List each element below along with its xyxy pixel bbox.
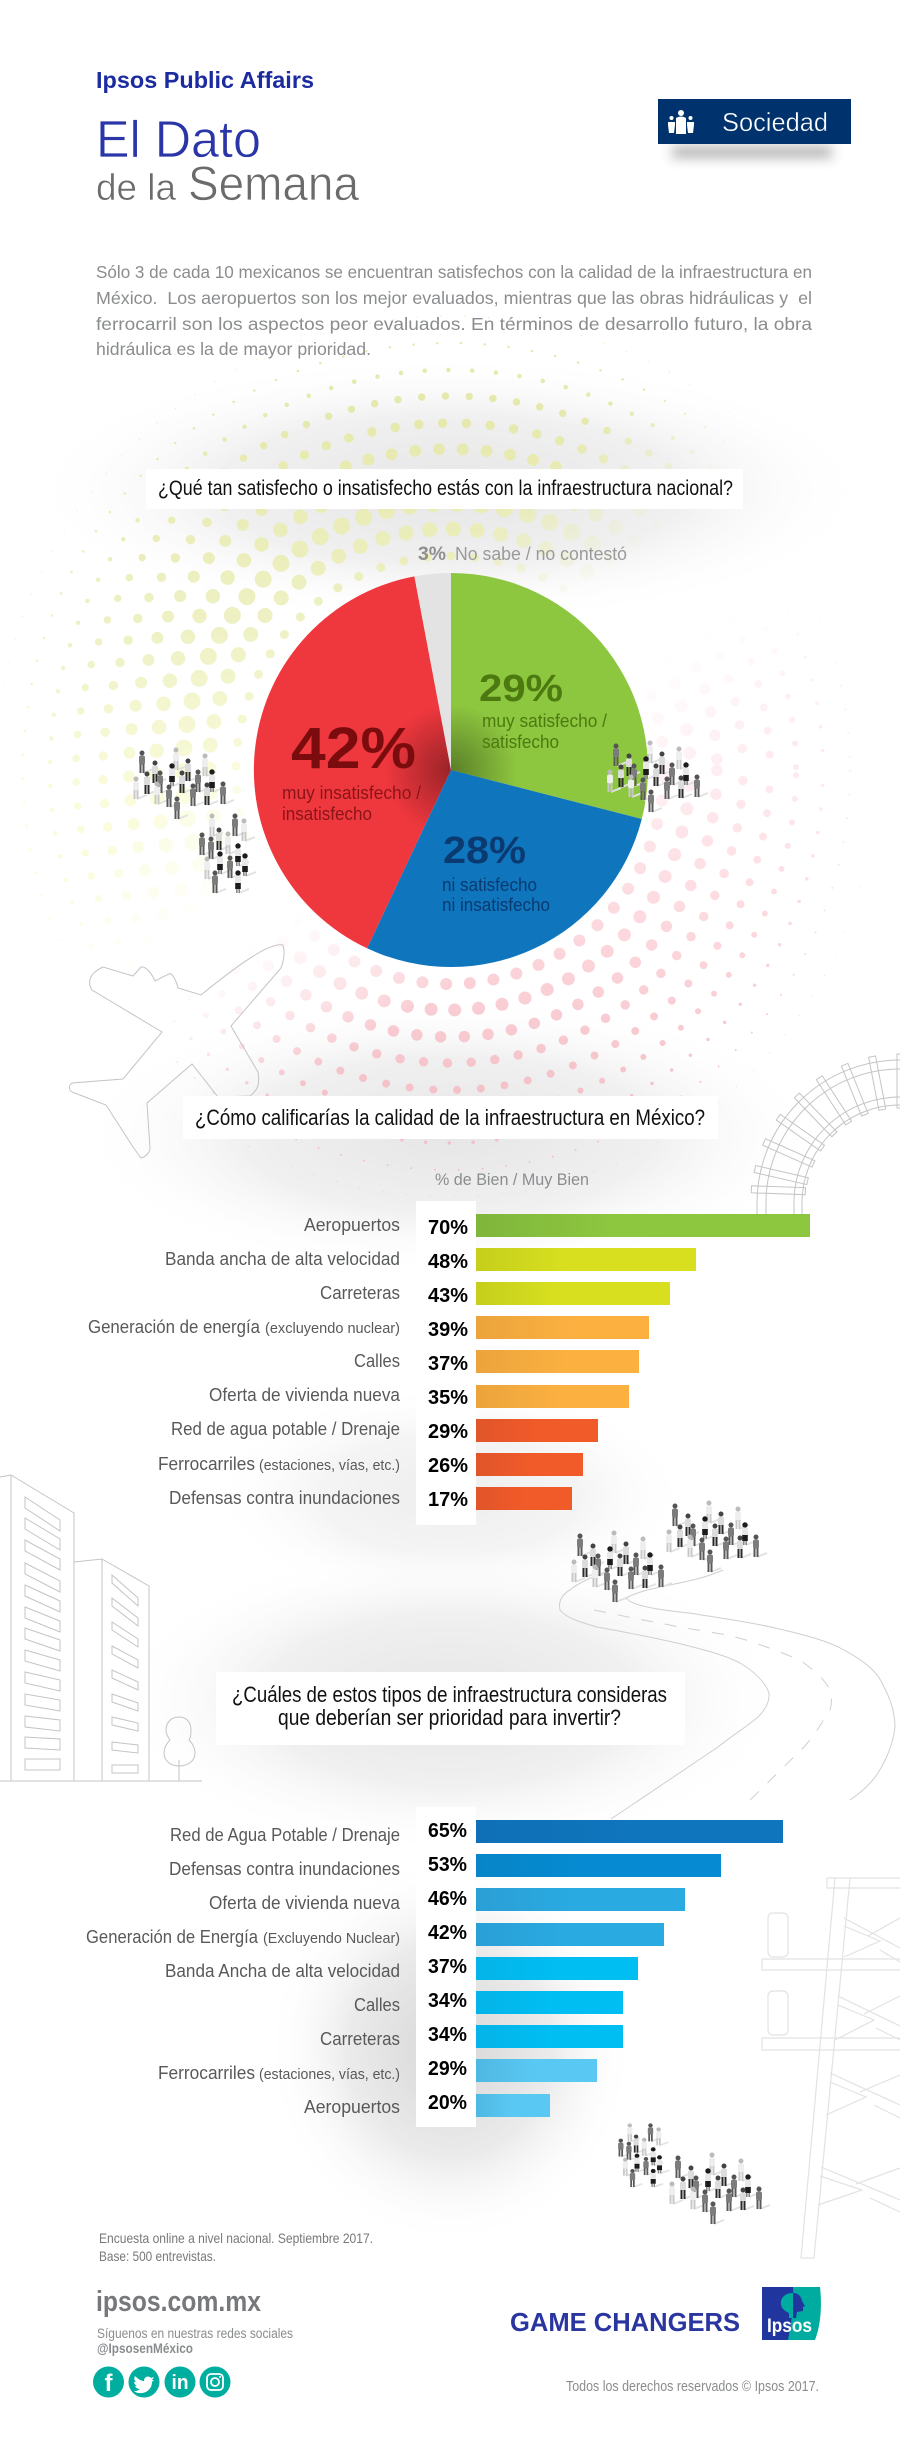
question 1 heading: ¿Qué tan satisfecho o insatisfecho estás con la infraestructura nacional?: [158, 477, 733, 500]
social follow text: Síguenos en nuestras redes sociales: [97, 2326, 293, 2341]
bar row: Calles: [354, 1350, 639, 1375]
icon: crowd near road upper: [666, 1500, 767, 1572]
bar row: Red de agua: [170, 1820, 783, 1845]
bar row: Carreteras: 34%: [428, 2024, 467, 2046]
intro paragraph: hidráulica es la de mayor prioridad.: [96, 339, 371, 359]
icon: airplane outline: [69, 945, 284, 1158]
bar row: Calles: [354, 1990, 623, 2015]
survey note: Encuesta online a nivel nacional. Septiembre 2017.: [99, 2230, 373, 2246]
bar row: Ferrocarriles: (estaciones, vías, etc.): [259, 1458, 400, 1474]
social icons: [93, 2366, 230, 2398]
intro paragraph: México. Los aeropuertos son los mejor evaluados, mientras que las obras hidráulicas y el: [96, 288, 812, 308]
bar row: Generación de energía: [86, 1922, 664, 1947]
pie label 42%: 42%: [291, 716, 416, 781]
bar row: Defensas: [169, 1487, 572, 1511]
bar row: Ferrocarriles: [158, 2058, 597, 2083]
bar row: Generación de energía: (Excluyendo Nuclear): [263, 1931, 400, 1947]
brand name: Ipsos Public Affairs: [96, 67, 314, 93]
bar row: Generación de energía: [88, 1316, 649, 1341]
icon: crowd bottom small: [618, 2123, 669, 2187]
title: El Dato: [96, 111, 261, 169]
bar row: Generación de energía: Generación de Energía: [86, 1927, 259, 1947]
bar row: Aeropuertos: 20%: [428, 2092, 467, 2114]
bar row: Red de agua: Red de Agua Potable / Drenaje: [170, 1825, 400, 1845]
pie label 42%: [282, 716, 421, 824]
bar row: Calles: Calles: [354, 1995, 400, 2015]
Ipsos logo: [762, 2287, 821, 2340]
no answer label: No sabe / no contestó: [455, 544, 627, 564]
title: Semana: [188, 158, 359, 211]
bar row: Red de agua: 29%: [428, 1421, 468, 1443]
bar row: Red de agua: 65%: [428, 1820, 467, 1842]
bar row: Ferrocarriles: 29%: [428, 2058, 467, 2080]
intro paragraph: ferrocarril son los aspectos peor evaluados. En términos de desarrollo futuro, la obra: [96, 314, 812, 334]
pie label 29%: satisfecho: [482, 732, 559, 752]
bar row: Banda ancha: 37%: [428, 1956, 467, 1978]
title: [96, 111, 359, 211]
bar row: Oferta de vivienda: [209, 1385, 629, 1409]
bar row: Ferrocarriles: (estaciones, vías, etc.): [259, 2067, 400, 2083]
Ipsos logo: Ipsos: [767, 2316, 812, 2337]
intro paragraph: Sólo 3 de cada 10 mexicanos se encuentran satisfechos con la calidad de la infraestructura en: [96, 262, 812, 282]
bar row: Carreteras: Carreteras: [320, 1283, 400, 1303]
bar row: Ferrocarriles: [158, 1453, 583, 1477]
question 3 heading: que deberían ser prioridad para invertir?: [278, 1705, 621, 1730]
pie label 28%: ni satisfecho: [442, 875, 537, 895]
bar row: Generación de energía: 42%: [428, 1922, 467, 1944]
category badge: Sociedad: [658, 99, 851, 158]
icon: crowd bottom large: [669, 2152, 770, 2224]
question 3 heading: ¿Cuáles de estos tipos de infraestructura consideras: [232, 1682, 667, 1707]
bar row: Oferta de vivienda: Oferta de vivienda nueva: [209, 1893, 401, 1913]
bar row: Carreteras: [320, 2024, 623, 2049]
question 2 heading: ¿Cómo calificarías la calidad de la infraestructura en México?: [195, 1105, 705, 1130]
pie label 42%: muy insatisfecho /: [282, 783, 421, 803]
bar row: Banda ancha: [165, 1248, 696, 1273]
icon: winding road: [559, 1570, 895, 1819]
icon: instagram: [200, 2366, 230, 2398]
icon: crowd near road lower: [571, 1530, 672, 1602]
no answer label: 3%: [418, 544, 446, 565]
website: ipsos.com.mx: [96, 2286, 261, 2318]
icon: linkedin: in: [172, 2372, 188, 2394]
icon: transmission tower: [762, 1878, 900, 2258]
bar row: Carreteras: 43%: [428, 1285, 468, 1307]
bar row: Banda ancha: Banda ancha de alta velocidad: [165, 1249, 400, 1269]
game changers slogan: GAME CHANGERS: [510, 2307, 740, 2337]
category badge: Sociedad: Sociedad: [722, 107, 828, 137]
title: de la: [96, 167, 176, 208]
bar row: Banda ancha: Banda Ancha de alta velocidad: [165, 1961, 400, 1981]
pie label 29%: 29%: [479, 668, 563, 710]
icon: tree: [164, 1717, 195, 1781]
bar chart: investment priority: [86, 1807, 783, 2127]
bar row: Ferrocarriles: 26%: [428, 1455, 468, 1477]
bar row: Aeropuertos: Aeropuertos: [304, 1215, 400, 1235]
bar row: Defensas: 17%: [428, 1489, 468, 1511]
bar row: Oferta de vivienda: Oferta de vivienda nueva: [209, 1385, 401, 1405]
bar row: Ferrocarriles: Ferrocarriles: [158, 2063, 255, 2083]
halftone dots: yellow arc: [0, 316, 748, 986]
bar row: Calles: 34%: [428, 1990, 467, 2012]
bar row: Ferrocarriles: Ferrocarriles: [158, 1454, 255, 1474]
bar row: Red de agua: Red de agua potable / Drenaje: [171, 1419, 400, 1439]
social follow text: [97, 2326, 293, 2356]
bar row: Banda ancha: 48%: [428, 1251, 468, 1273]
chart 2 subtitle: % de Bien / Muy Bien: [435, 1170, 589, 1189]
bar row: Oferta de vivienda: 46%: [428, 1888, 467, 1910]
survey note: Base: 500 entrevistas.: [99, 2248, 216, 2264]
icon: buildings: [0, 1475, 202, 1781]
icon: crowd left lower: [199, 814, 256, 893]
icon: facebook: f: [104, 2370, 114, 2397]
halftone dots: pink arc: [136, 614, 878, 1198]
question 2 heading: [183, 1096, 718, 1139]
bar row: Oferta de vivienda: [209, 1888, 685, 1913]
soft grey background glows: [25, 355, 875, 2245]
bar row: Banda ancha: [165, 1956, 638, 1981]
intro paragraph: [96, 262, 812, 359]
icon: railway track: [751, 1054, 900, 1214]
bar row: Defensas: Defensas contra inundaciones: [169, 1859, 400, 1879]
pie chart: [254, 573, 648, 967]
copyright: Todos los derechos reservados © Ipsos 2017.: [566, 2378, 819, 2395]
bar row: Aeropuertos: [304, 1214, 810, 1239]
bar row: Aeropuertos: Aeropuertos: [304, 2097, 400, 2117]
bar row: Carreteras: [320, 1282, 670, 1307]
pie label 28%: ni insatisfecho: [442, 895, 550, 915]
question 3 heading: [216, 1672, 685, 1745]
bar row: Defensas: [169, 1854, 721, 1879]
icon: people: [668, 110, 694, 134]
bar row: Generación de energía: Generación de energía: [88, 1317, 261, 1337]
pie label 28%: [442, 830, 550, 915]
icon: crowd left upper: [133, 748, 234, 819]
bar row: Generación de energía: 39%: [428, 1319, 468, 1341]
bar row: Red de agua: [171, 1419, 598, 1443]
bar row: Calles: 37%: [428, 1353, 468, 1375]
bar row: Defensas: 53%: [428, 1854, 467, 1876]
bar row: Generación de energía: (excluyendo nuclear): [265, 1321, 400, 1337]
question 1 heading: [146, 469, 743, 509]
pie label 29%: muy satisfecho /: [482, 711, 607, 731]
icon: twitter: [128, 2366, 160, 2398]
icon: crowd on pie: [607, 740, 708, 812]
bar row: Calles: Calles: [354, 1351, 400, 1371]
bar row: Oferta de vivienda: 35%: [428, 1387, 468, 1409]
bar row: Defensas: Defensas contra inundaciones: [169, 1488, 400, 1508]
pie label 29%: [479, 668, 607, 752]
survey note: [99, 2230, 373, 2264]
bar row: Aeropuertos: [304, 2092, 550, 2117]
bar row: Aeropuertos: 70%: [428, 1217, 468, 1239]
pie label 28%: 28%: [443, 830, 526, 872]
bar row: Carreteras: Carreteras: [320, 2029, 400, 2049]
bar chart: quality of infrastructure: [88, 1201, 810, 1525]
social follow text: @IpsosenMéxico: [97, 2341, 193, 2356]
pie label 42%: insatisfecho: [282, 804, 372, 824]
